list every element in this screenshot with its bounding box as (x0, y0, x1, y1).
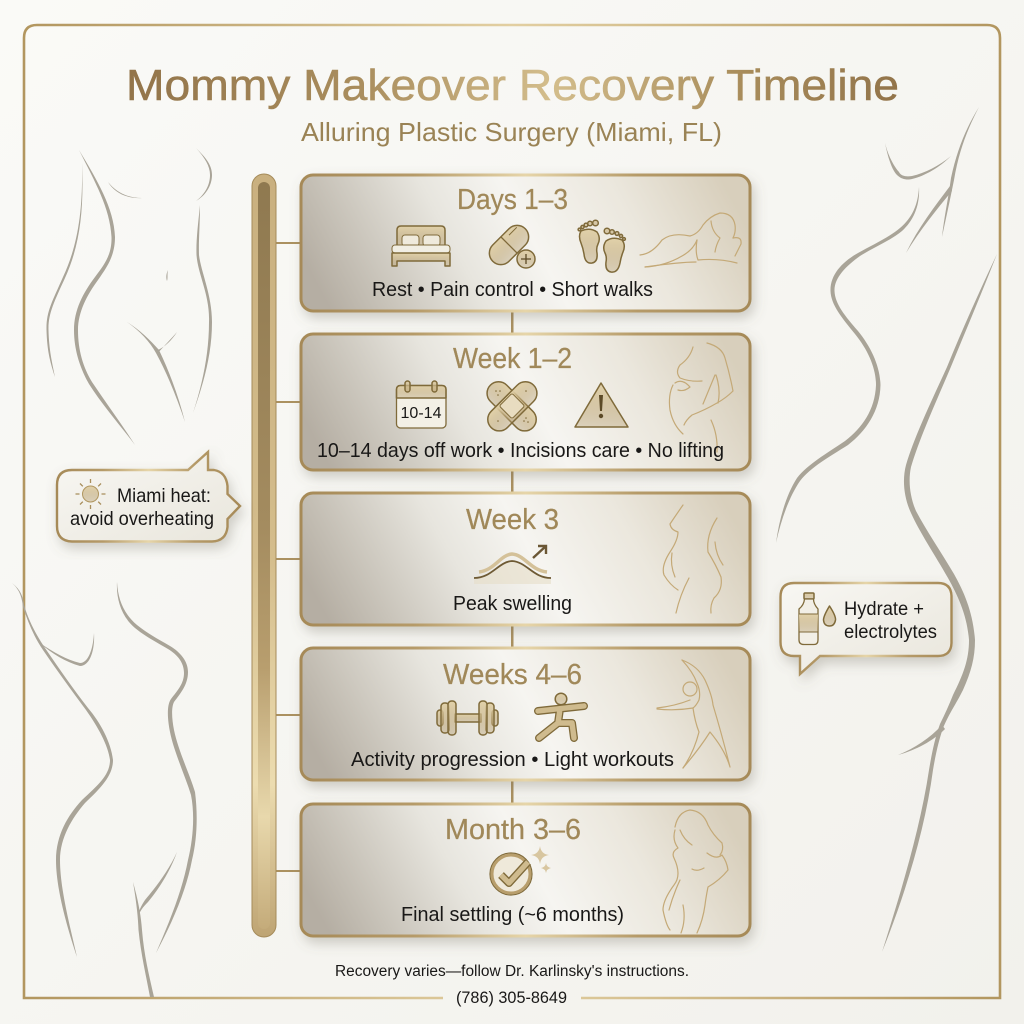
callout: Miami heat: avoid overheating (70, 508, 214, 530)
text: Days 1–3 summary: Rest • Pain control • Short walks (372, 278, 653, 301)
title: Mommy Makeover Recovery Timeline (126, 61, 899, 110)
heading: Days 1–3: Days 1–3 (457, 184, 568, 216)
line art: right upper torso (776, 107, 997, 952)
icon: swelling curve with arrow (474, 546, 551, 584)
text: Month 3–6 summary: Final settling (~6 months) (401, 903, 624, 926)
text: Miami heat note: Miami heat: (117, 485, 211, 507)
icon: sun (76, 479, 106, 509)
panel: Month 3–6 (301, 804, 750, 936)
icon: bed (392, 226, 450, 266)
panel: Week 1–2 (301, 334, 750, 470)
icon: warning triangle (575, 383, 628, 427)
line art: stretching figure (657, 660, 730, 768)
icon: calendar: 10-14 (400, 405, 442, 422)
icon: check badge with sparkles (490, 846, 551, 895)
subtitle: Alluring Plastic Surgery (Miami, FL) (301, 117, 722, 147)
line art: abdomen silhouette (663, 505, 723, 613)
panel: Week 3 (301, 493, 750, 625)
heading: Week 3: Week 3 (466, 504, 559, 536)
icon: calendar (396, 381, 446, 428)
heading: Week 1–2: Week 1–2 (453, 343, 572, 375)
line art: reclining figure (640, 213, 741, 267)
icon: exercise pose (538, 693, 584, 738)
text: Weeks 4–6 summary: Activity progression • Light workouts (351, 748, 674, 771)
callout: Miami heat (57, 452, 240, 542)
text: hydrate note: Hydrate + (844, 598, 924, 620)
timeline rail with branches (252, 174, 514, 937)
icon: droplet (824, 606, 836, 626)
icon: crossed bandages (482, 377, 542, 436)
line art: standing woman (663, 810, 728, 933)
icon: pill (485, 221, 535, 269)
panel: Weeks 4–6 (301, 648, 750, 780)
heading: Weeks 4–6: Weeks 4–6 (443, 659, 582, 691)
footer phone number: (786) 305-8649 (456, 989, 567, 1007)
line art: left lower torso (12, 582, 197, 997)
heading: Month 3–6: Month 3–6 (445, 814, 581, 846)
text: hydrate note (844, 598, 937, 643)
icon: dumbbell (437, 701, 498, 735)
text: Week 1–2 summary: 10–14 days off work • Incisions care • No lifting (317, 439, 724, 462)
line art: left upper torso (46, 148, 212, 445)
text: hydrate note: electrolytes (844, 621, 937, 643)
line art: pregnant figure (669, 343, 733, 452)
callout: hydrate (780, 583, 952, 674)
text: Week 3 summary: Peak swelling (453, 592, 572, 615)
icon: water bottle (799, 593, 818, 644)
footer disclaimer: Recovery varies—follow Dr. Karlinsky's instructions. (335, 963, 689, 980)
panel: Days 1–3 (301, 175, 750, 311)
icon: footprints (578, 220, 625, 272)
